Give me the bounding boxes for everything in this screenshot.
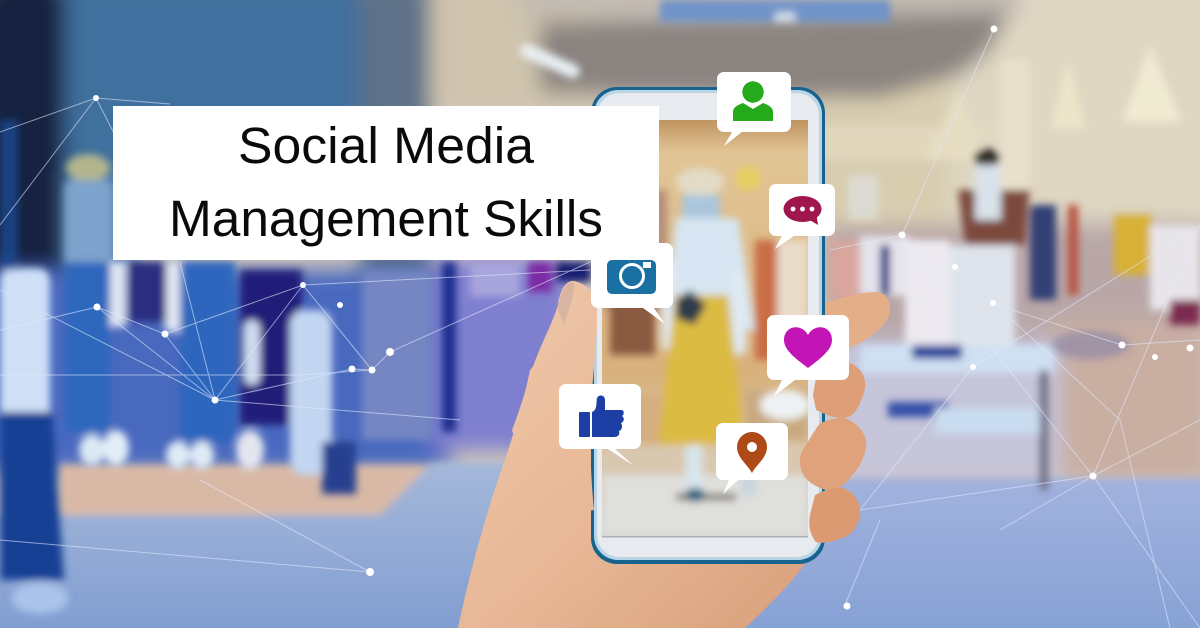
icon: thumbs up bubble — [559, 384, 641, 466]
icon: location pin bubble — [716, 423, 788, 494]
hand: thumb and fingers — [512, 281, 890, 543]
icon: profile bubble — [717, 72, 791, 146]
title text — [169, 117, 603, 247]
phone — [591, 87, 825, 564]
finger three — [800, 418, 866, 490]
finger four — [809, 488, 860, 543]
icon: heart bubble — [767, 315, 849, 396]
blurred store items right — [518, 0, 1200, 490]
phone body — [591, 87, 825, 564]
title box — [113, 106, 659, 260]
phone screen photo — [602, 120, 810, 536]
thumb — [512, 281, 597, 520]
title text: Management Skills — [169, 190, 603, 247]
title text: Social Media — [238, 117, 535, 174]
finger two — [813, 363, 865, 418]
icon: camera bubble — [591, 243, 673, 324]
blurred mannequins left — [0, 120, 591, 614]
phone bottom glass edge — [602, 536, 808, 538]
icon: chat bubble — [769, 184, 835, 249]
finger one — [825, 292, 890, 360]
hand: palm — [458, 300, 812, 628]
